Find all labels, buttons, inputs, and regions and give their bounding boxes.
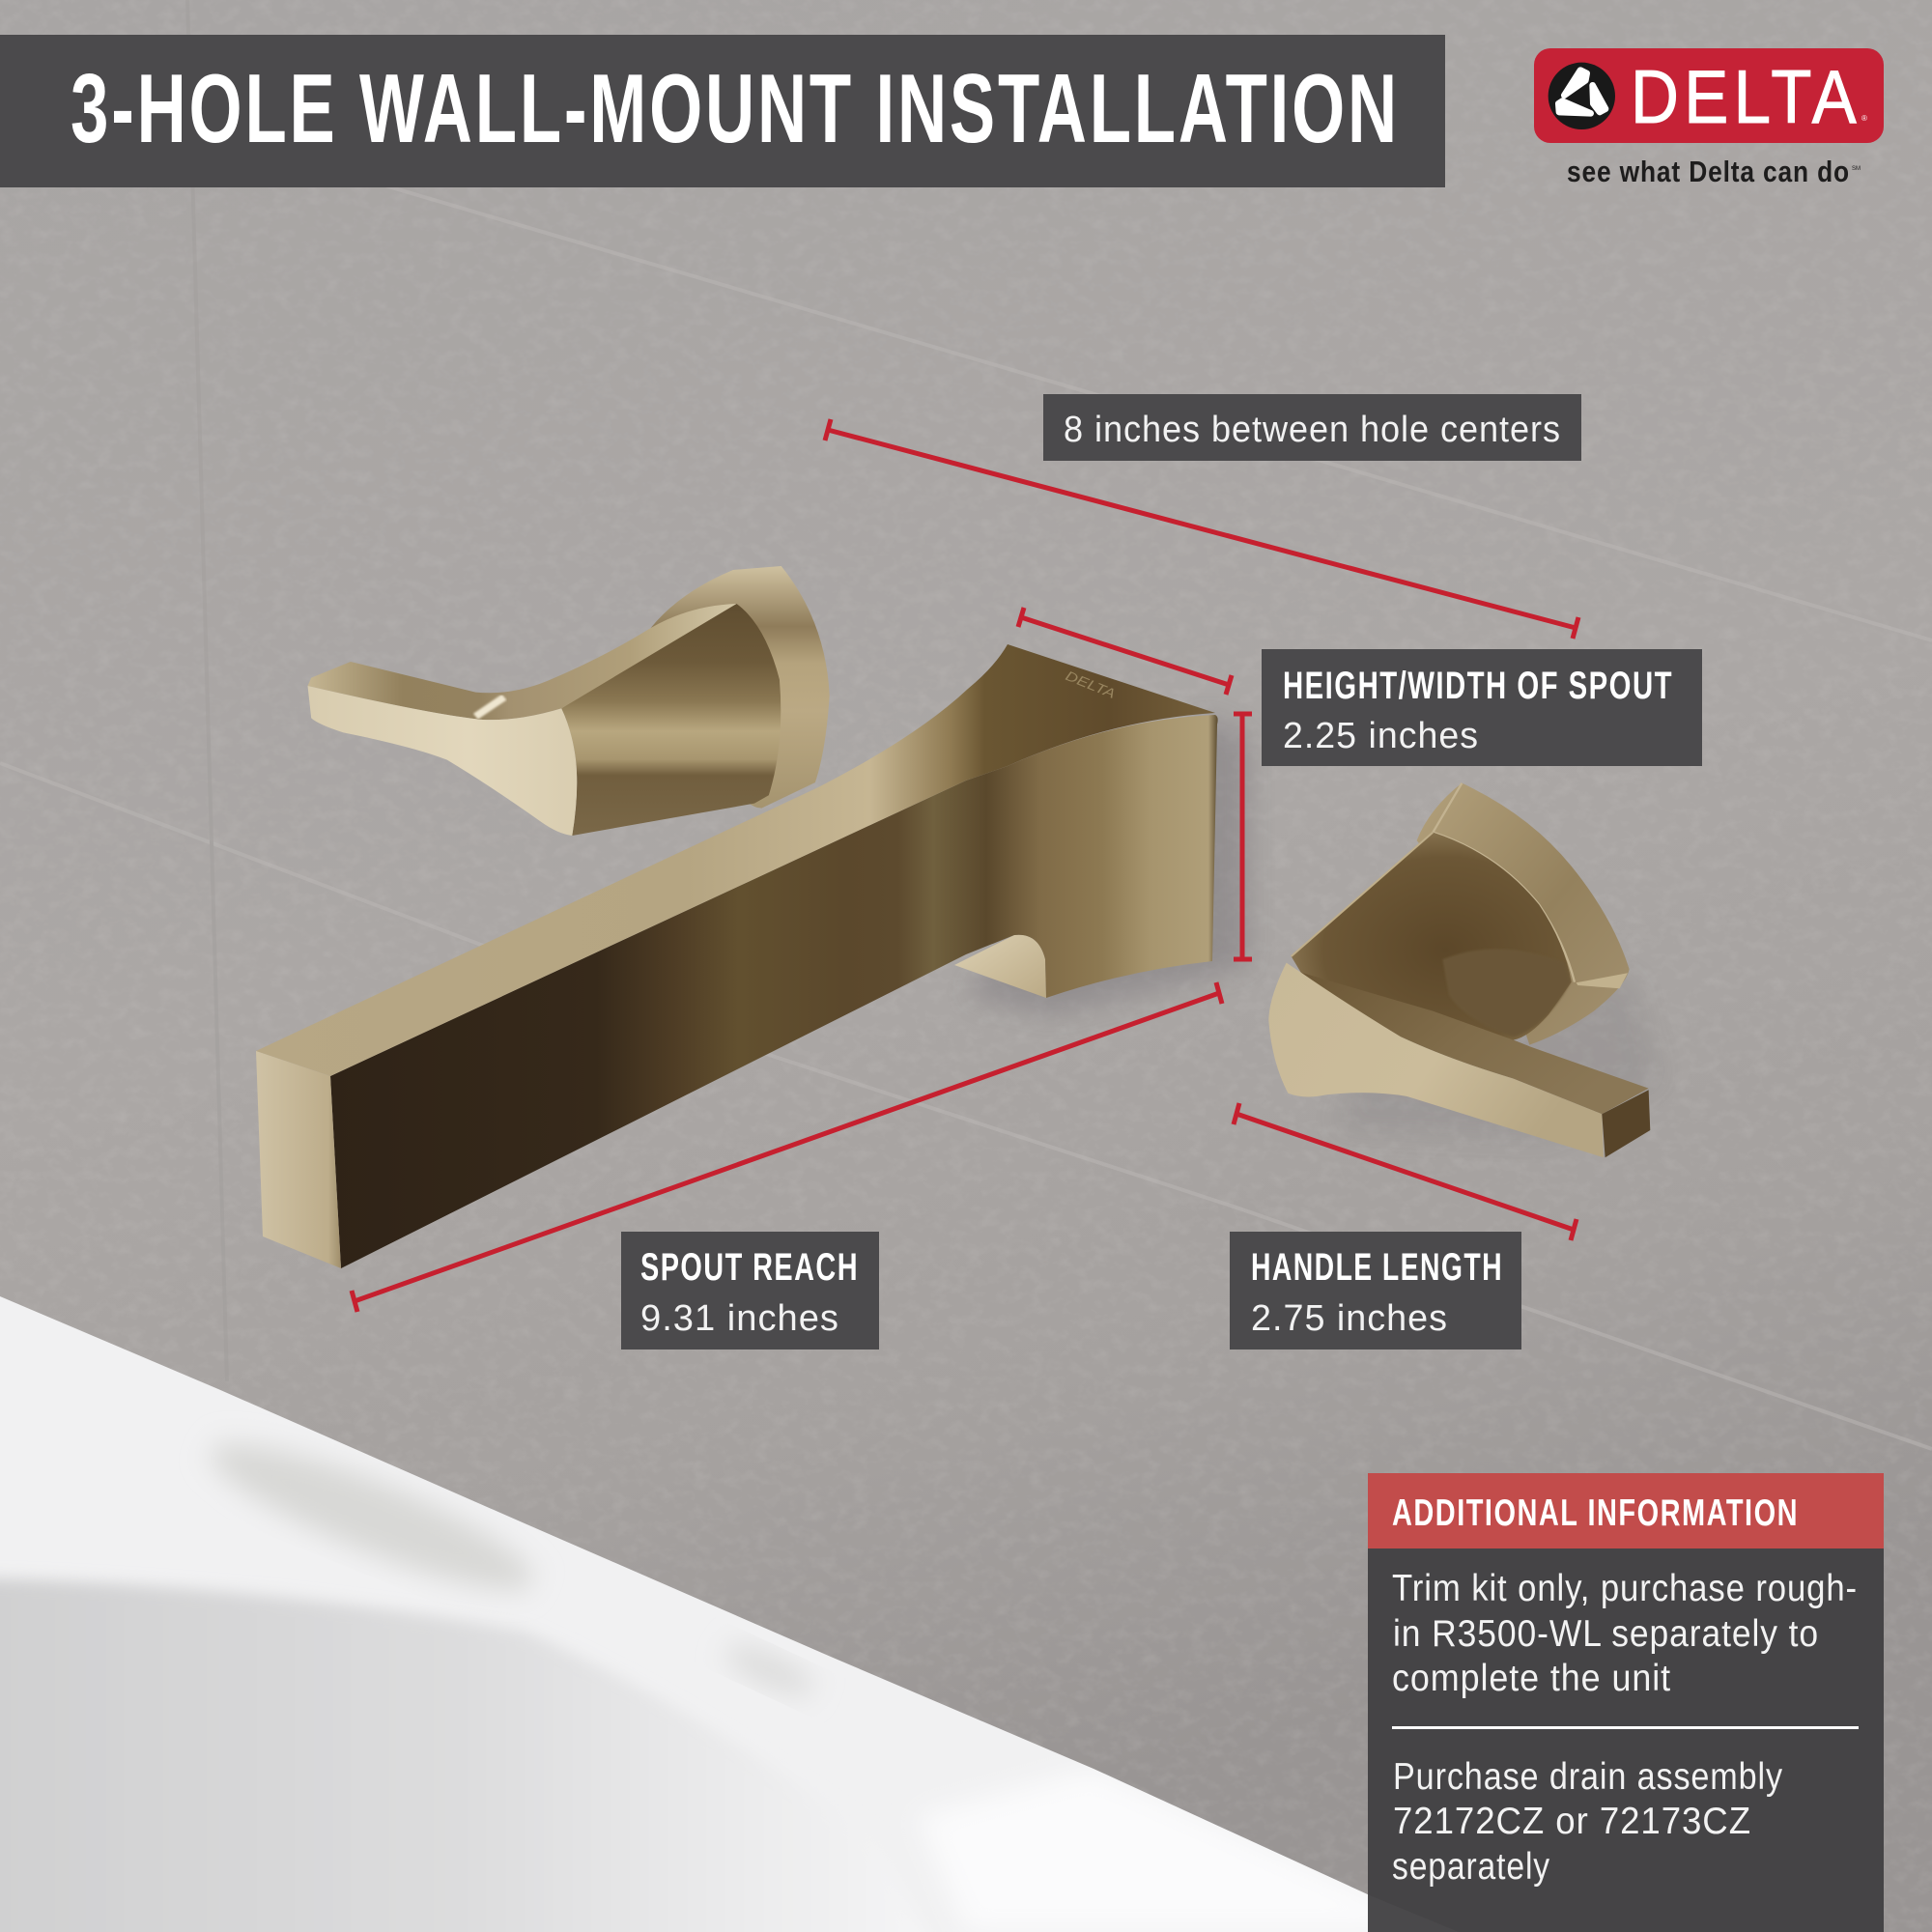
dimension: spout reach — [352, 982, 1222, 1312]
faucet shadows on wall — [966, 715, 1662, 1140]
handle body — [1292, 833, 1572, 1046]
dimension: spout height — [1234, 713, 1252, 960]
callout: hole spacing: 8 inches between hole centers — [1064, 410, 1561, 450]
handle cone — [561, 604, 781, 836]
handle back plate — [1417, 783, 1630, 1045]
handle back plate — [651, 566, 830, 809]
text: rough-in note: Trim kit only, purchase rough- — [1392, 1568, 1858, 1609]
callout: handle length: 2.75 inches — [1251, 1298, 1448, 1339]
handle lever face — [307, 686, 577, 836]
spout top surface — [256, 644, 1215, 1076]
dimension: handle length — [1234, 1103, 1577, 1240]
text: drain assembly note: separately — [1392, 1846, 1550, 1888]
Delta logo: SM — [1852, 166, 1861, 172]
callout: spout reach: 9.31 inches — [640, 1298, 839, 1339]
callout: handle length — [1230, 1232, 1521, 1350]
spout end face — [256, 1051, 341, 1268]
spout side face — [330, 715, 1218, 1268]
callout: spout reach — [621, 1232, 879, 1350]
spout — [256, 644, 1218, 1268]
text: rough-in note: in R3500-WL separately to — [1393, 1613, 1819, 1655]
text: drain assembly note: 72172CZ or 72173CZ — [1393, 1801, 1751, 1842]
panel heading — [1368, 1473, 1884, 1548]
text: rough-in note — [1392, 1568, 1858, 1699]
handle lever face — [1268, 963, 1604, 1157]
dimension: spout width — [1018, 608, 1232, 695]
Delta logo: DELTA — [1631, 54, 1861, 139]
icon: Delta triangle mark — [1548, 63, 1615, 129]
dimension: 8 inches between holes — [825, 419, 1578, 639]
handle lever top — [1301, 973, 1649, 1114]
handle lever end cap — [1602, 1090, 1650, 1157]
text: rough-in note: complete the unit — [1392, 1658, 1671, 1699]
handle lever top and neck — [307, 604, 736, 720]
callout: height/width of spout: 2.25 inches — [1283, 716, 1479, 756]
spout back piece — [954, 935, 1046, 998]
title — [0, 35, 1445, 187]
text: drain assembly note: Purchase drain assembly — [1393, 1756, 1783, 1798]
callout: height/width of spout — [1262, 649, 1702, 766]
engraved Delta mark: DELTA — [1064, 668, 1118, 701]
Delta logo: see what Delta can do — [1567, 155, 1850, 188]
left handle — [307, 566, 830, 836]
callout: height/width of spout: HEIGHT/WIDTH OF SPOUT — [1283, 665, 1673, 707]
right handle — [1268, 783, 1650, 1157]
Delta logo — [1534, 48, 1884, 188]
panel: additional information — [1368, 1473, 1884, 1932]
callout: handle length: HANDLE LENGTH — [1251, 1246, 1503, 1289]
panel heading: ADDITIONAL INFORMATION — [1392, 1492, 1799, 1534]
callout: spout reach: SPOUT REACH — [640, 1246, 859, 1289]
callout: hole spacing — [1043, 394, 1581, 461]
handle stem — [1442, 949, 1571, 1037]
text: drain assembly note — [1392, 1756, 1783, 1888]
bathtub edge — [0, 1296, 1368, 1932]
Delta logo: ® — [1861, 114, 1867, 123]
title: 3-HOLE WALL-MOUNT INSTALLATION — [71, 55, 1400, 163]
